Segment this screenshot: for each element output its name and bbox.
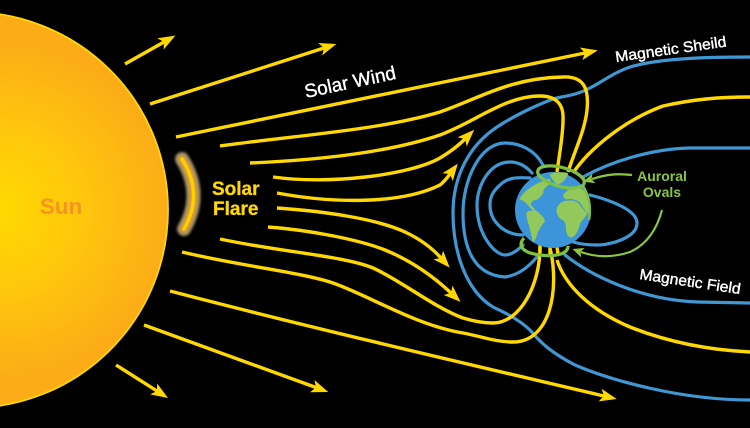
earth [515,162,591,256]
flare arrow 2 [277,174,450,200]
wind line into south pole outer [182,248,554,342]
magnetic field lines [453,57,750,400]
polar field yellow upper right [573,97,750,173]
europe and asia [563,187,589,214]
globe ocean [515,172,591,248]
flare arrow 1 [273,139,465,180]
greenland [550,172,568,185]
sun label: Sun [40,194,82,219]
north america [519,179,551,212]
solar flare label: Solar [212,179,260,200]
inner left loop outer [463,143,543,277]
continents [519,172,589,242]
arrow: bottom auroral pointer [581,210,662,256]
solar wind label: Solar Wind [303,63,398,103]
wind arrow top long [150,48,324,104]
right upper field line [583,148,750,177]
arrow: top auroral pointer [592,174,632,179]
solar flare label [212,179,260,220]
africa [557,200,587,237]
wind line into south pole inner [220,239,540,323]
top auroral oval [535,162,587,192]
solar wind lines [116,42,750,396]
wind line into north pole inner [250,96,563,172]
solar flare label: Flare [213,199,258,220]
inner left loop middle [477,162,532,255]
wind arrow past shield [176,53,585,137]
magnetic shield boundary [453,57,750,400]
wind arrow past earth bottom [170,291,604,396]
auroral ovals label: Ovals [643,184,681,200]
right closed loop [573,195,637,245]
right lower field line [565,255,750,303]
polar field yellow lower right [557,260,750,352]
flare arrow 3 [277,208,441,258]
flare arrow 4 [268,227,451,293]
wind arrow lower [144,325,316,388]
wind arrow top short [125,42,164,64]
bottom auroral oval [521,238,568,256]
solar flare [182,159,194,229]
magnetic shield label: Magnetic Sheild [614,34,727,66]
bottom yellow stubs [540,240,558,254]
south america [526,210,545,242]
aurora band on east limb [583,186,590,220]
inner left loop small [490,178,530,235]
magnetic field label: Magnetic Field [638,266,742,298]
auroral ovals label: Auroral [637,168,687,184]
wind line into north pole outer [220,77,587,172]
wind arrow bottom short [116,365,157,391]
auroral ovals label [637,168,687,200]
